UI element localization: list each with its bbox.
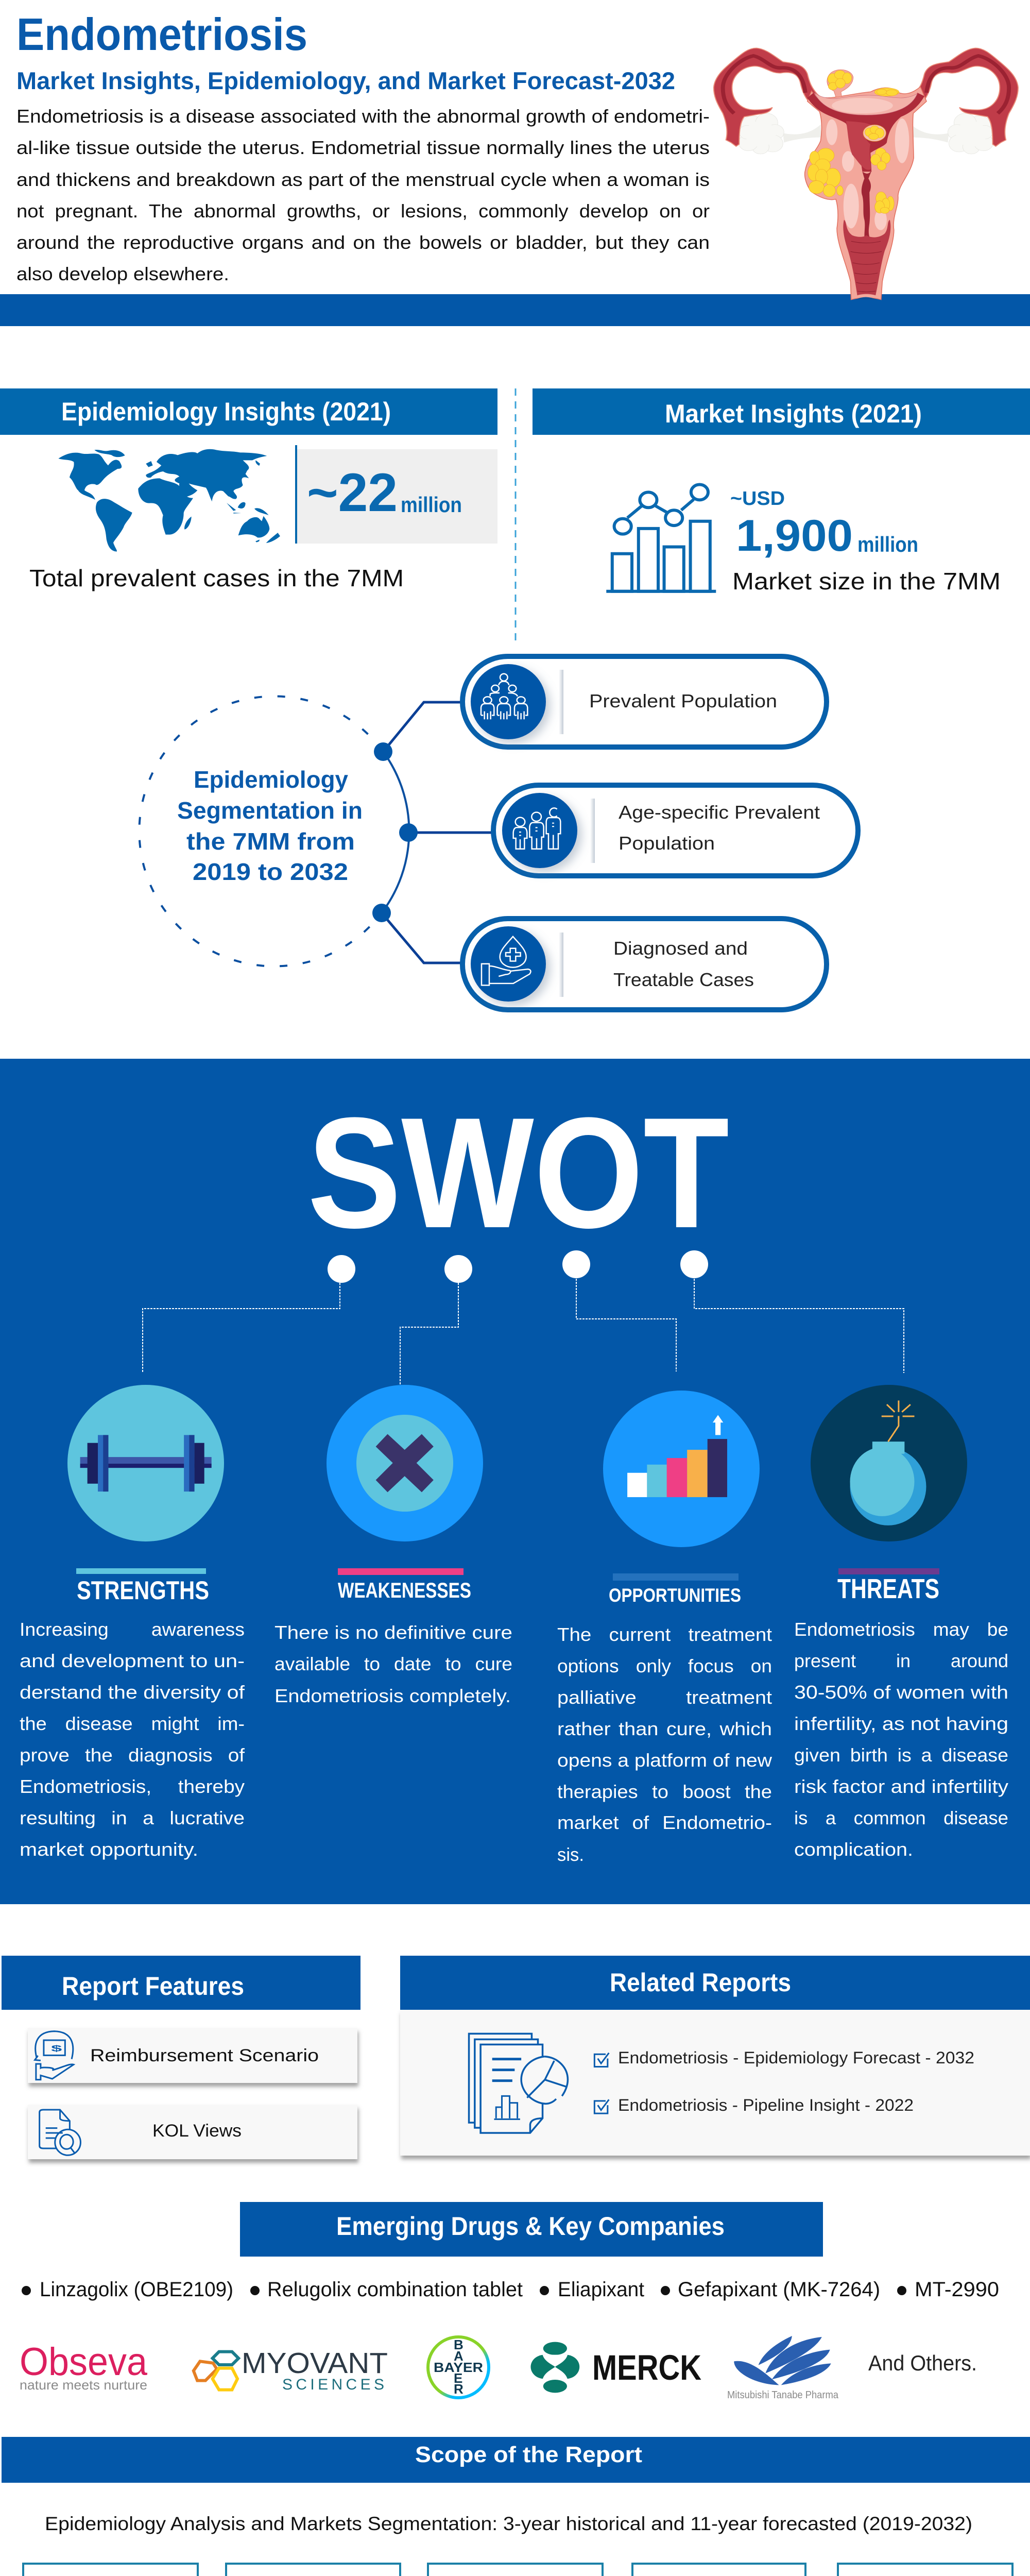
- threats text: infertility, as not having: [794, 1713, 1008, 1734]
- drug list: [22, 2278, 999, 2301]
- pill: diagnosed and treatable cases: [462, 919, 827, 1010]
- card: case studies: [625, 2564, 814, 2576]
- drug list: Eliapixant: [558, 2278, 644, 2301]
- fallopian tubes: [714, 48, 1018, 146]
- opportunities text: palliative treatment: [557, 1687, 772, 1708]
- heading: Report Features: [62, 1972, 244, 2001]
- threats text: Endometriosis may be: [794, 1619, 1008, 1640]
- pill: prevalent population: [462, 656, 827, 747]
- heading bar: [533, 388, 1030, 435]
- drug list: Gefapixant (MK-7264): [678, 2278, 880, 2301]
- segmentation circle: [139, 696, 492, 966]
- column: threats: [794, 1385, 1008, 1860]
- panel: introduction: [0, 9, 1030, 326]
- heading bar: [2, 1956, 360, 2010]
- panel: related reports: [400, 1956, 1030, 2156]
- blue band: [0, 294, 1030, 326]
- icon: dumbbell: [67, 1385, 224, 1541]
- icon: growth chart: [606, 484, 716, 591]
- report list background: [400, 2010, 1030, 2156]
- heading bar: [240, 2202, 823, 2257]
- endometrial lesions: [808, 70, 899, 213]
- stat: market size: 1,900: [736, 511, 853, 561]
- heading bar: [400, 1956, 1030, 2010]
- panel: report features: [2, 1956, 360, 2159]
- column: opportunities: [557, 1391, 772, 1865]
- stat box: total prevalent cases: million: [401, 493, 462, 517]
- strengths text: and development to un-: [20, 1650, 245, 1671]
- intro paragraph: not pregnant. The abnormal growths, or lesions, commonly develop on or: [16, 200, 710, 222]
- weaknesses text: [274, 1622, 512, 1706]
- card: analyst's view: [831, 2564, 1020, 2576]
- scope subtitle: Epidemiology Analysis and Markets Segmentation: 3-year historical and 11-year forecasted (2019-2032): [45, 2513, 972, 2534]
- heading: Market Insights (2021): [665, 399, 922, 428]
- column: threats: THREATS: [837, 1573, 939, 1604]
- icon: people pyramid: [481, 674, 527, 719]
- opportunities text: [557, 1624, 772, 1865]
- intro paragraph: and thickens and breakdown as part of the menstrual cycle when a woman is: [16, 169, 710, 190]
- logo: Bayer: [428, 2337, 489, 2398]
- intro paragraph: Endometriosis is a disease associated with the abnormal growth of endometri-: [16, 106, 710, 127]
- intro paragraph: al-like tissue outside the uterus. Endometrial tissue normally lines the uterus: [16, 137, 710, 158]
- vagina: [843, 220, 890, 295]
- logo: Merck: MERCK: [592, 2348, 701, 2387]
- opportunities text: sis.: [557, 1844, 584, 1865]
- pill: diagnosed and treatable cases: Treatable Cases: [613, 969, 754, 990]
- panel: epidemiology segmentation: [139, 656, 858, 1010]
- opportunities text: rather than cure, which: [557, 1718, 772, 1739]
- and others note: And Others.: [868, 2351, 977, 2375]
- threats text: complication.: [794, 1839, 913, 1860]
- strengths text: derstand the diversity of: [20, 1682, 245, 1703]
- intro paragraph: [16, 106, 710, 284]
- title: Endometriosis: [16, 9, 307, 60]
- drug list: Relugolix combination tablet: [267, 2278, 523, 2301]
- logo: Myovant Sciences: [194, 2347, 388, 2393]
- column: weaknesses: WEAKENESSES: [338, 1578, 471, 1602]
- opportunities text: opens a platform of new: [557, 1750, 772, 1771]
- pill: age-specific prevalent population: Age-specific Prevalent: [619, 802, 820, 823]
- opportunities text: therapies to boost the: [557, 1781, 772, 1802]
- panel: epidemiology insights: [0, 388, 497, 591]
- strengths text: the disease might im-: [20, 1713, 245, 1734]
- heading: Scope of the Report: [415, 2442, 642, 2467]
- panel: emerging drugs and key companies: [20, 2202, 999, 2401]
- stat box: total prevalent cases: [295, 445, 497, 544]
- card: novel drug uptake patterns: [421, 2564, 611, 2576]
- strengths text: market opportunity.: [20, 1839, 198, 1860]
- drug list: Linzagolix (OBE2109): [40, 2278, 233, 2301]
- heading: Emerging Drugs & Key Companies: [336, 2212, 725, 2241]
- caption: Total prevalent cases in the 7MM: [29, 565, 404, 591]
- threats text: risk factor and infertility: [794, 1776, 1008, 1797]
- panel: market insights: [533, 388, 1030, 595]
- circle label: 2019 to 2032: [193, 858, 348, 885]
- logo: Bayer: R: [454, 2381, 464, 2397]
- logo: Myovant Sciences: MYOVANT: [242, 2347, 388, 2380]
- strengths text: Endometriosis, thereby: [20, 1776, 245, 1797]
- opportunities text: options only focus on: [557, 1655, 772, 1676]
- icon: document and magnifier: [40, 2110, 80, 2155]
- feature: reimbursement scenario: Reimbursement Scenario: [90, 2046, 319, 2065]
- stat box: total prevalent cases: ~22: [307, 463, 398, 523]
- pill: diagnosed and treatable cases: Diagnosed and: [613, 938, 748, 959]
- uterus body: [805, 87, 926, 300]
- dotted connectors: [143, 1279, 904, 1388]
- icon: hand and drop: [482, 937, 531, 985]
- stat: market size: [730, 488, 918, 561]
- icon: reports and pie chart: [469, 2033, 568, 2133]
- subtitle: Market Insights, Epidemiology, and Market Forecast-2032: [16, 67, 675, 94]
- circle label: Epidemiology: [194, 766, 348, 793]
- column: strengths: STRENGTHS: [77, 1576, 209, 1605]
- intro paragraph: also develop elsewhere.: [16, 263, 229, 284]
- column: opportunities: OPPORTUNITIES: [609, 1585, 741, 1606]
- threats text: given birth is a disease: [794, 1744, 1008, 1766]
- circle label: [177, 766, 363, 885]
- intro paragraph: around the reproductive organs and on the bowels or bladder, but they can: [16, 232, 710, 253]
- icon: uterus illustration: [714, 48, 1018, 300]
- drug list: MT-2990: [915, 2278, 999, 2301]
- pill: age-specific prevalent population: [493, 785, 858, 876]
- logo: Myovant Sciences: SCIENCES: [282, 2376, 384, 2393]
- circle label: the 7MM from: [186, 828, 355, 855]
- icon: rising bars: [603, 1391, 760, 1547]
- heading bar: [0, 388, 497, 435]
- stat: market size: ~USD: [730, 488, 785, 510]
- stat: market size: million: [857, 532, 918, 556]
- cervical canal: [862, 171, 871, 237]
- logo: Bayer: A: [454, 2348, 464, 2364]
- strengths text: Increasing awareness: [20, 1619, 245, 1640]
- card: analysis: [16, 2564, 206, 2576]
- weaknesses text: available to date to cure: [274, 1653, 512, 1674]
- feature: KOL views: KOL Views: [152, 2121, 242, 2141]
- icon: reimbursement hand: [35, 2031, 74, 2080]
- heading: Epidemiology Insights (2021): [61, 397, 391, 426]
- logo: Bayer: BAYER: [434, 2360, 483, 2375]
- logo: Mitsubishi Tanabe Pharma: [727, 2336, 839, 2401]
- background: [0, 1059, 1030, 1904]
- threats text: present in around: [794, 1650, 1008, 1671]
- heading: Related Reports: [610, 1968, 791, 1997]
- feature: KOL views: [28, 2105, 357, 2159]
- column: strengths: [20, 1385, 245, 1860]
- inner light tissue: [826, 118, 909, 230]
- threats text: [794, 1619, 1008, 1860]
- report item 1: Endometriosis - Epidemiology Forecast - 2032: [618, 2048, 974, 2067]
- SWOT dots: [328, 1250, 708, 1283]
- cavity: [808, 93, 924, 172]
- heading bar: [2, 2437, 1030, 2483]
- icon: bomb: [811, 1385, 967, 1541]
- weaknesses text: Endometriosis completely.: [274, 1685, 511, 1706]
- icon: world map: [58, 449, 280, 552]
- opportunities text: market of Endometrio-: [557, 1812, 772, 1833]
- logo: ObsEva: Obseva: [20, 2340, 148, 2384]
- threats text: is a common disease: [794, 1807, 1008, 1828]
- ovaries and ligaments: [739, 113, 993, 154]
- strengths text: prove the diagnosis of: [20, 1744, 245, 1766]
- weaknesses text: There is no definitive cure: [274, 1622, 512, 1643]
- strengths text: [20, 1619, 245, 1860]
- strengths text: resulting in a lucrative: [20, 1807, 245, 1828]
- column: weaknesses: [274, 1385, 512, 1706]
- circle label: Segmentation in: [177, 797, 363, 824]
- icon: family: [513, 808, 560, 849]
- opportunities text: The current treatment: [557, 1624, 772, 1645]
- logo: ObsEva: nature meets nurture: [20, 2377, 147, 2393]
- panel: scope of the report: [2, 2437, 1030, 2576]
- pill: prevalent population: Prevalent Population: [589, 690, 777, 711]
- icon: reimbursement hand: $: [51, 2044, 62, 2053]
- feature: reimbursement scenario: [28, 2028, 357, 2083]
- report item 2: Endometriosis - Pipeline Insight - 2022: [618, 2096, 914, 2114]
- divider: [515, 388, 516, 642]
- icon: cross: [327, 1385, 483, 1541]
- logo: Merck: [530, 2342, 701, 2393]
- logo: Mitsubishi Tanabe Pharma: Mitsubishi Tanabe Pharma: [727, 2389, 839, 2401]
- logo: Bayer: B: [454, 2337, 464, 2352]
- panel: SWOT: [0, 1059, 1030, 1904]
- SWOT title: SWOT: [307, 1084, 729, 1261]
- logo: Bayer: E: [454, 2370, 462, 2386]
- caption: Market size in the 7MM: [732, 568, 1001, 595]
- pill: age-specific prevalent population: Population: [619, 833, 715, 854]
- threats text: 30-50% of women with: [794, 1682, 1008, 1703]
- card: market analysis: [219, 2564, 408, 2576]
